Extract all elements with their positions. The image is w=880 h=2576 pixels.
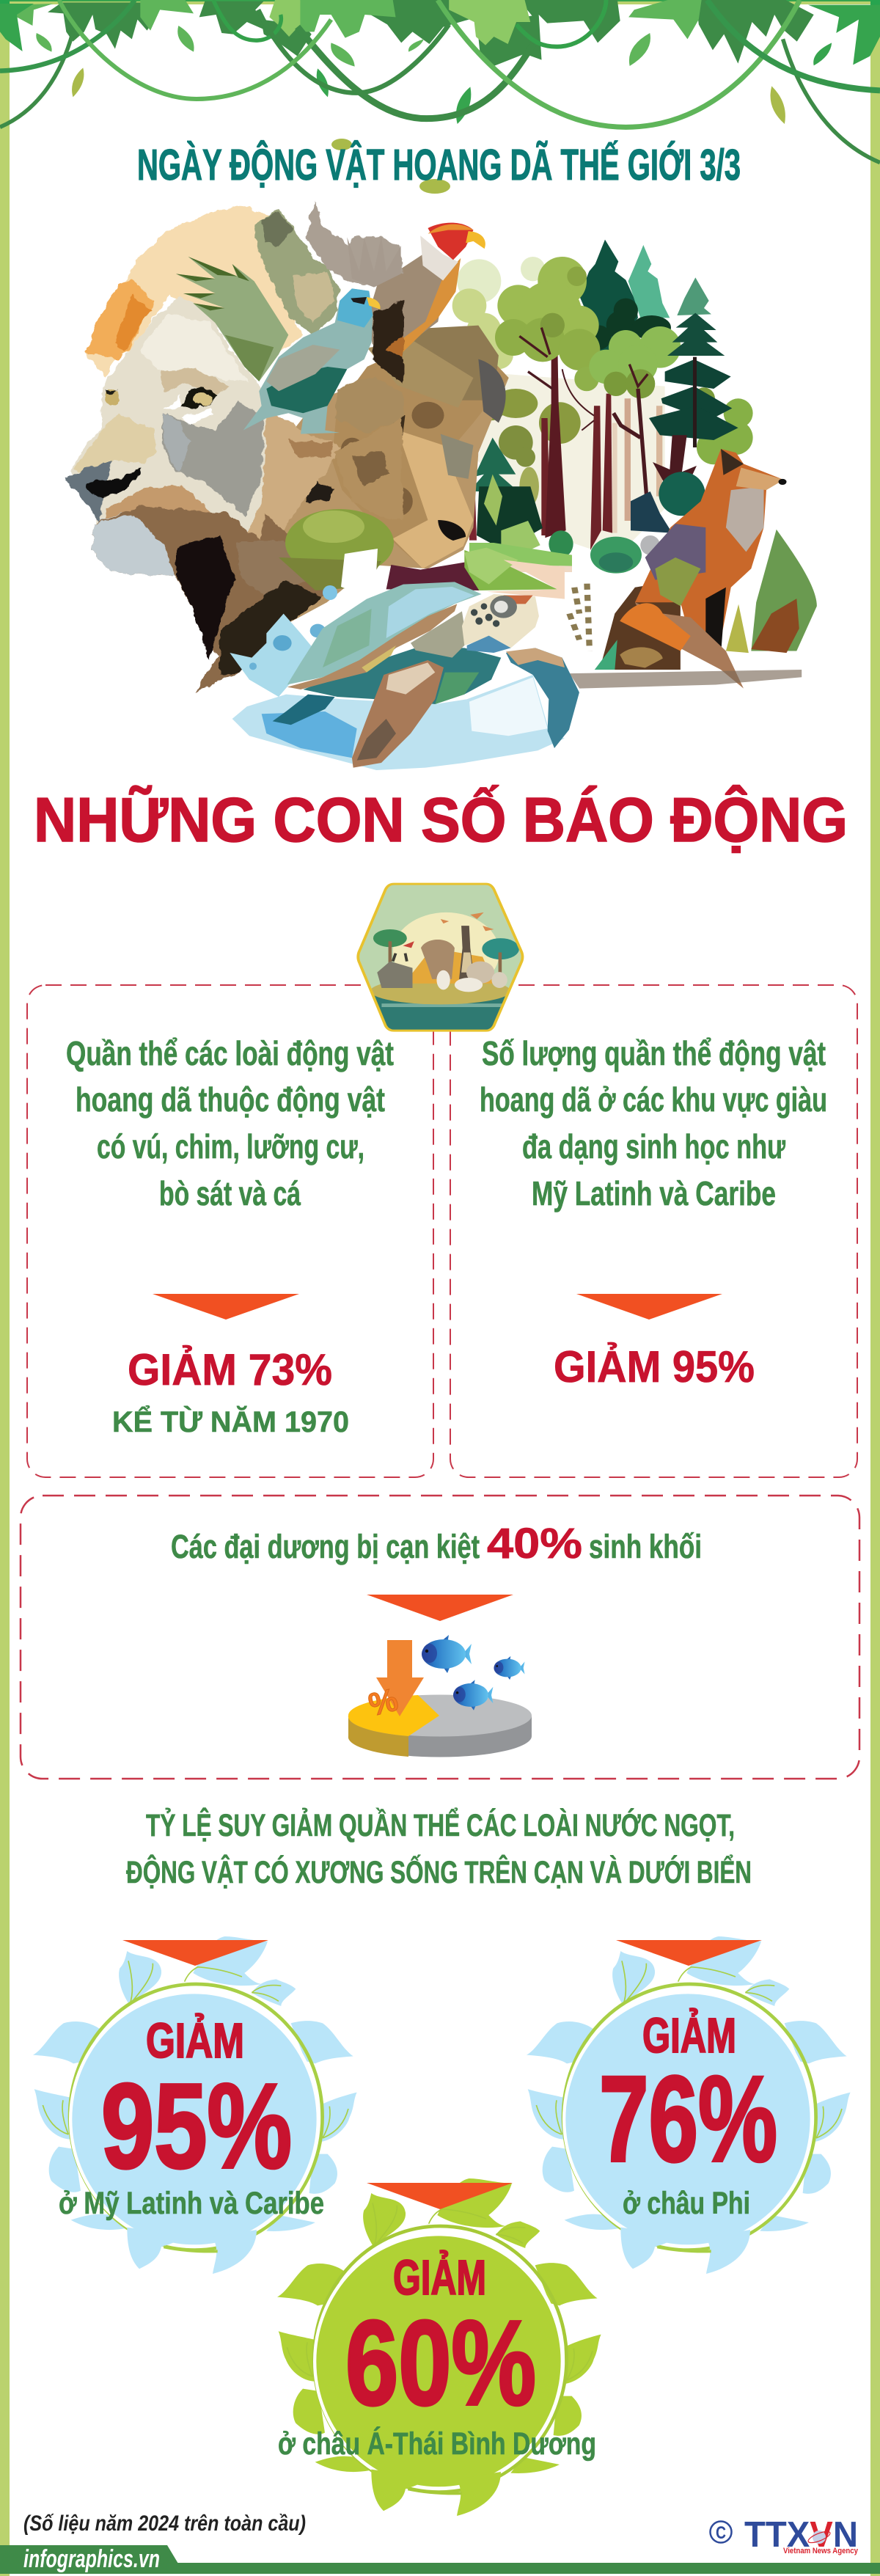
icon: hexagon with animals — [353, 882, 527, 1035]
icon: pie chart with falling arrow and fish — [348, 1635, 532, 1757]
forest — [452, 240, 753, 574]
small acacia tree and splash of white — [279, 509, 394, 600]
wreath stat: Latin America: GIẢM — [146, 2013, 244, 2068]
description text left: hoang dã thuộc động vật — [76, 1080, 385, 1119]
value: giảm 95%: GIẢM 95% — [554, 1342, 755, 1391]
decorative olive leaves behind title — [331, 139, 450, 194]
oceans statement — [171, 1520, 702, 1567]
hero illustration: lion, birds, forest, fox and turtle — [66, 200, 817, 770]
description text left: có vú, chim, lưỡng cư, — [97, 1127, 364, 1166]
wreath stat: Africa: ở châu Phi — [623, 2186, 750, 2221]
lion base layer and leopard, vulture — [246, 223, 509, 632]
oceans statement: 40% — [487, 1520, 582, 1567]
description text right — [480, 1034, 827, 1212]
wreath stat: Latin America: ở Mỹ Latinh và Caribe — [59, 2186, 324, 2221]
fox with forest floor and small bird — [569, 449, 817, 689]
wreath stat: Africa — [527, 1936, 851, 2274]
logo: TTXVN: TTXVN — [744, 2515, 858, 2555]
footnote: (Số liệu năm 2024 trên toàn cầu) — [23, 2511, 306, 2536]
arrow — [367, 1595, 513, 1621]
large green feather leaf — [176, 257, 288, 381]
description text left — [66, 1034, 394, 1212]
sea turtle and water — [230, 548, 579, 770]
wreath stat: Asia-Pacific: 60% — [345, 2296, 536, 2430]
wreath stat: Asia-Pacific: ở châu Á-Thái Bình Dương — [278, 2426, 596, 2462]
wreath stat: Africa: 76% — [599, 2052, 777, 2187]
footer band with site name: infographics.vn — [23, 2545, 160, 2573]
lion head — [66, 200, 403, 692]
wreath stat: Latin America — [33, 1936, 357, 2274]
value: giảm 73%: GIẢM 73% — [128, 1345, 332, 1394]
logo: TTXVN: C — [716, 2523, 726, 2543]
section heading — [126, 1807, 752, 1890]
icon: pie chart with falling arrow and fish: % — [365, 1682, 402, 1724]
footer band with site name — [0, 2545, 880, 2574]
wreath stat: Asia-Pacific — [277, 2178, 601, 2516]
oceans statement: Các đại dương bị cạn kiệt — [171, 1528, 480, 1565]
wreath stat: Asia-Pacific: GIẢM — [393, 2250, 486, 2305]
panel: oceans biomass — [21, 1496, 859, 1779]
panel: left statistic — [27, 985, 433, 1477]
hanging vines and leaves header — [0, 0, 880, 163]
panel: right statistic — [450, 985, 857, 1477]
blue-headed bird — [243, 288, 381, 434]
arrow right — [576, 1294, 722, 1320]
main heading: NHỮNG CON SỐ BÁO ĐỘNG — [34, 785, 848, 855]
description text left: bò sát và cá — [159, 1174, 301, 1212]
since 1970: KỂ TỪ NĂM 1970 — [112, 1404, 349, 1438]
description text right: Mỹ Latinh và Caribe — [532, 1174, 776, 1212]
logo: TTXVN: Vietnam News Agency — [783, 2547, 859, 2555]
description text right: đa dạng sinh học như — [522, 1127, 786, 1166]
wing feathers — [347, 236, 401, 288]
arrow left — [153, 1294, 299, 1320]
wreath stat: Africa: GIẢM — [642, 2008, 736, 2063]
description text left: Quần thể các loài động vật — [66, 1034, 394, 1072]
oceans statement: sinh khối — [589, 1528, 702, 1565]
wreath stat: Latin America: 95% — [101, 2059, 292, 2193]
